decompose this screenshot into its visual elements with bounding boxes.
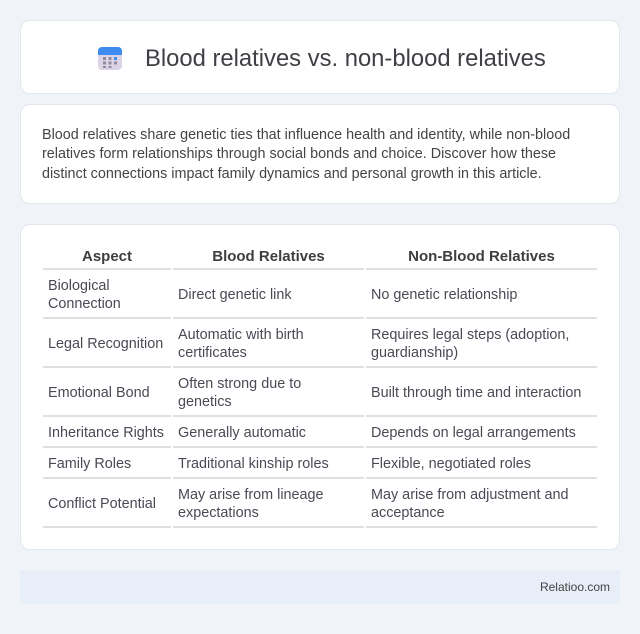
column headers: Aspect	[82, 248, 132, 265]
table rows: certificates	[178, 345, 247, 361]
table rows: No genetic relationship	[371, 287, 517, 303]
table rows: Inheritance Rights	[48, 425, 164, 441]
header panel	[20, 20, 620, 94]
table rows: Flexible, negotiated roles	[371, 456, 531, 472]
table rows: Depends on legal arrangements	[371, 425, 576, 441]
table rows: Generally automatic	[178, 425, 306, 441]
icon: calendar	[98, 47, 122, 70]
intro panel	[20, 104, 620, 204]
column headers: Blood Relatives	[212, 248, 325, 265]
table rows: genetics	[178, 394, 232, 410]
table rows: Family Roles	[48, 456, 131, 472]
table rows: Biological	[48, 278, 110, 294]
table rows: Legal Recognition	[48, 336, 163, 352]
table rows: expectations	[178, 505, 259, 521]
title: Blood relatives vs. non-blood relatives	[145, 45, 546, 72]
table rows: Conflict Potential	[48, 496, 156, 512]
table rows: Automatic with birth	[178, 327, 304, 343]
column headers: Non-Blood Relatives	[408, 248, 555, 265]
intro text	[42, 126, 570, 182]
table rows: Connection	[48, 296, 121, 312]
intro text: distinct connections impact family dynamics and personal growth in this article.	[42, 166, 542, 182]
column headers	[82, 248, 555, 265]
footer bar	[20, 570, 620, 604]
table rows	[43, 268, 597, 528]
intro text: Blood relatives share genetic ties that influence health and identity, while non-blood	[42, 126, 570, 142]
panel: comparison table	[20, 224, 620, 550]
table rows: Often strong due to	[178, 376, 301, 392]
table rows: Emotional Bond	[48, 385, 150, 401]
table rows: May arise from adjustment and	[371, 487, 569, 503]
table rows: Direct genetic link	[178, 287, 292, 303]
footer credit: Relatioo.com	[540, 580, 610, 594]
intro text: relatives form relationships through social bonds and choice. Discover how these	[42, 146, 556, 162]
table rows: Traditional kinship roles	[178, 456, 329, 472]
table rows: Built through time and interaction	[371, 385, 581, 401]
table rows: Requires legal steps (adoption,	[371, 327, 569, 343]
table rows: acceptance	[371, 505, 445, 521]
table rows: guardianship)	[371, 345, 458, 361]
table rows: May arise from lineage	[178, 487, 324, 503]
